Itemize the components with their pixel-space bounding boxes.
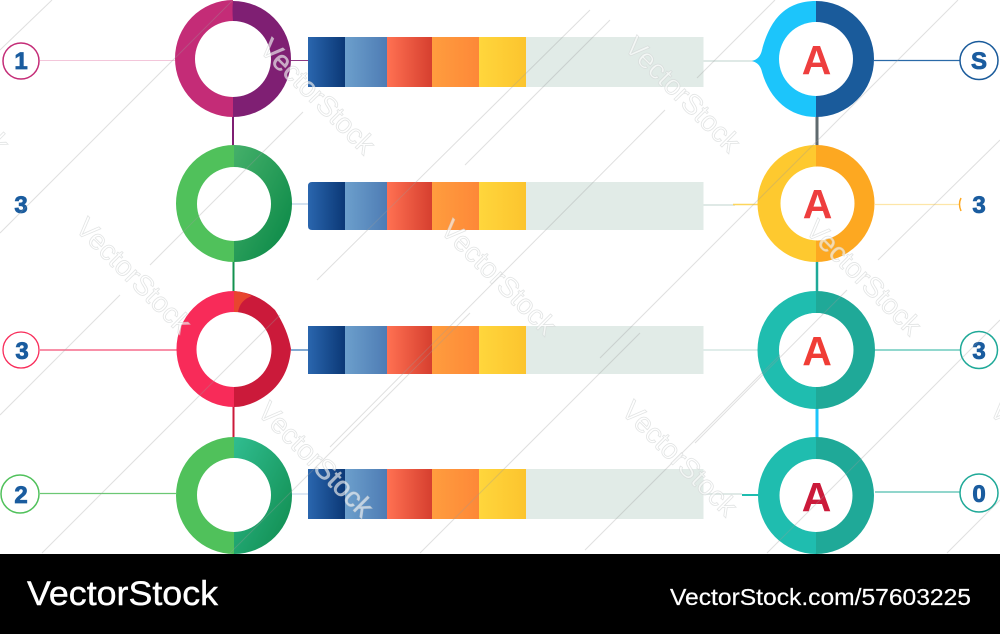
bar row 2 xyxy=(308,182,704,230)
watermark text xyxy=(0,31,1000,524)
bar row 1 xyxy=(308,37,704,87)
watermark text: VectorStock xyxy=(619,31,747,159)
left badge 1 xyxy=(3,43,39,79)
letter A: A xyxy=(802,328,832,374)
watermark text: VectorStock xyxy=(70,212,198,340)
right badge 1: S xyxy=(971,48,987,75)
left badge 4: 2 xyxy=(14,482,28,509)
bar row 3 xyxy=(308,326,704,374)
right ring 2 xyxy=(758,145,875,262)
watermark text: VectorStock xyxy=(616,395,744,523)
connector lines xyxy=(40,60,960,495)
right label 2: 3 xyxy=(972,192,986,219)
right ring 1 xyxy=(752,1,874,117)
footer brand: VectorStock xyxy=(27,575,219,613)
right badge 3: 3 xyxy=(972,338,986,365)
left ring 2 xyxy=(176,145,292,262)
right badge 3 xyxy=(960,332,998,368)
footer url: VectorStock.com/57603225 xyxy=(670,584,971,610)
letter A: A xyxy=(802,474,831,520)
watermark text: VectorStock xyxy=(254,33,382,161)
left ring 3 xyxy=(176,291,291,407)
right badge 4 xyxy=(960,474,998,512)
left label 2: 3 xyxy=(14,192,28,219)
right badge 4: 0 xyxy=(972,481,986,508)
left ring 4 xyxy=(176,437,292,554)
footer band xyxy=(0,554,1000,634)
right label 2 xyxy=(960,192,986,219)
watermark text: VectorStock xyxy=(435,214,563,342)
bar row 4 xyxy=(308,469,704,519)
left badge 3 xyxy=(3,332,39,368)
left ring 1 xyxy=(175,0,291,117)
left badge 1: 1 xyxy=(14,48,28,75)
right badge 1 xyxy=(960,42,998,80)
left badge 3: 3 xyxy=(15,338,29,365)
right ring 3 xyxy=(758,291,875,409)
watermark text: VectorStock xyxy=(800,214,928,342)
letter A: A xyxy=(803,181,832,227)
right ring 4 xyxy=(758,437,874,554)
left badge 4 xyxy=(1,475,39,513)
letter A: A xyxy=(802,37,831,83)
watermark text: VectorStock xyxy=(252,396,380,524)
